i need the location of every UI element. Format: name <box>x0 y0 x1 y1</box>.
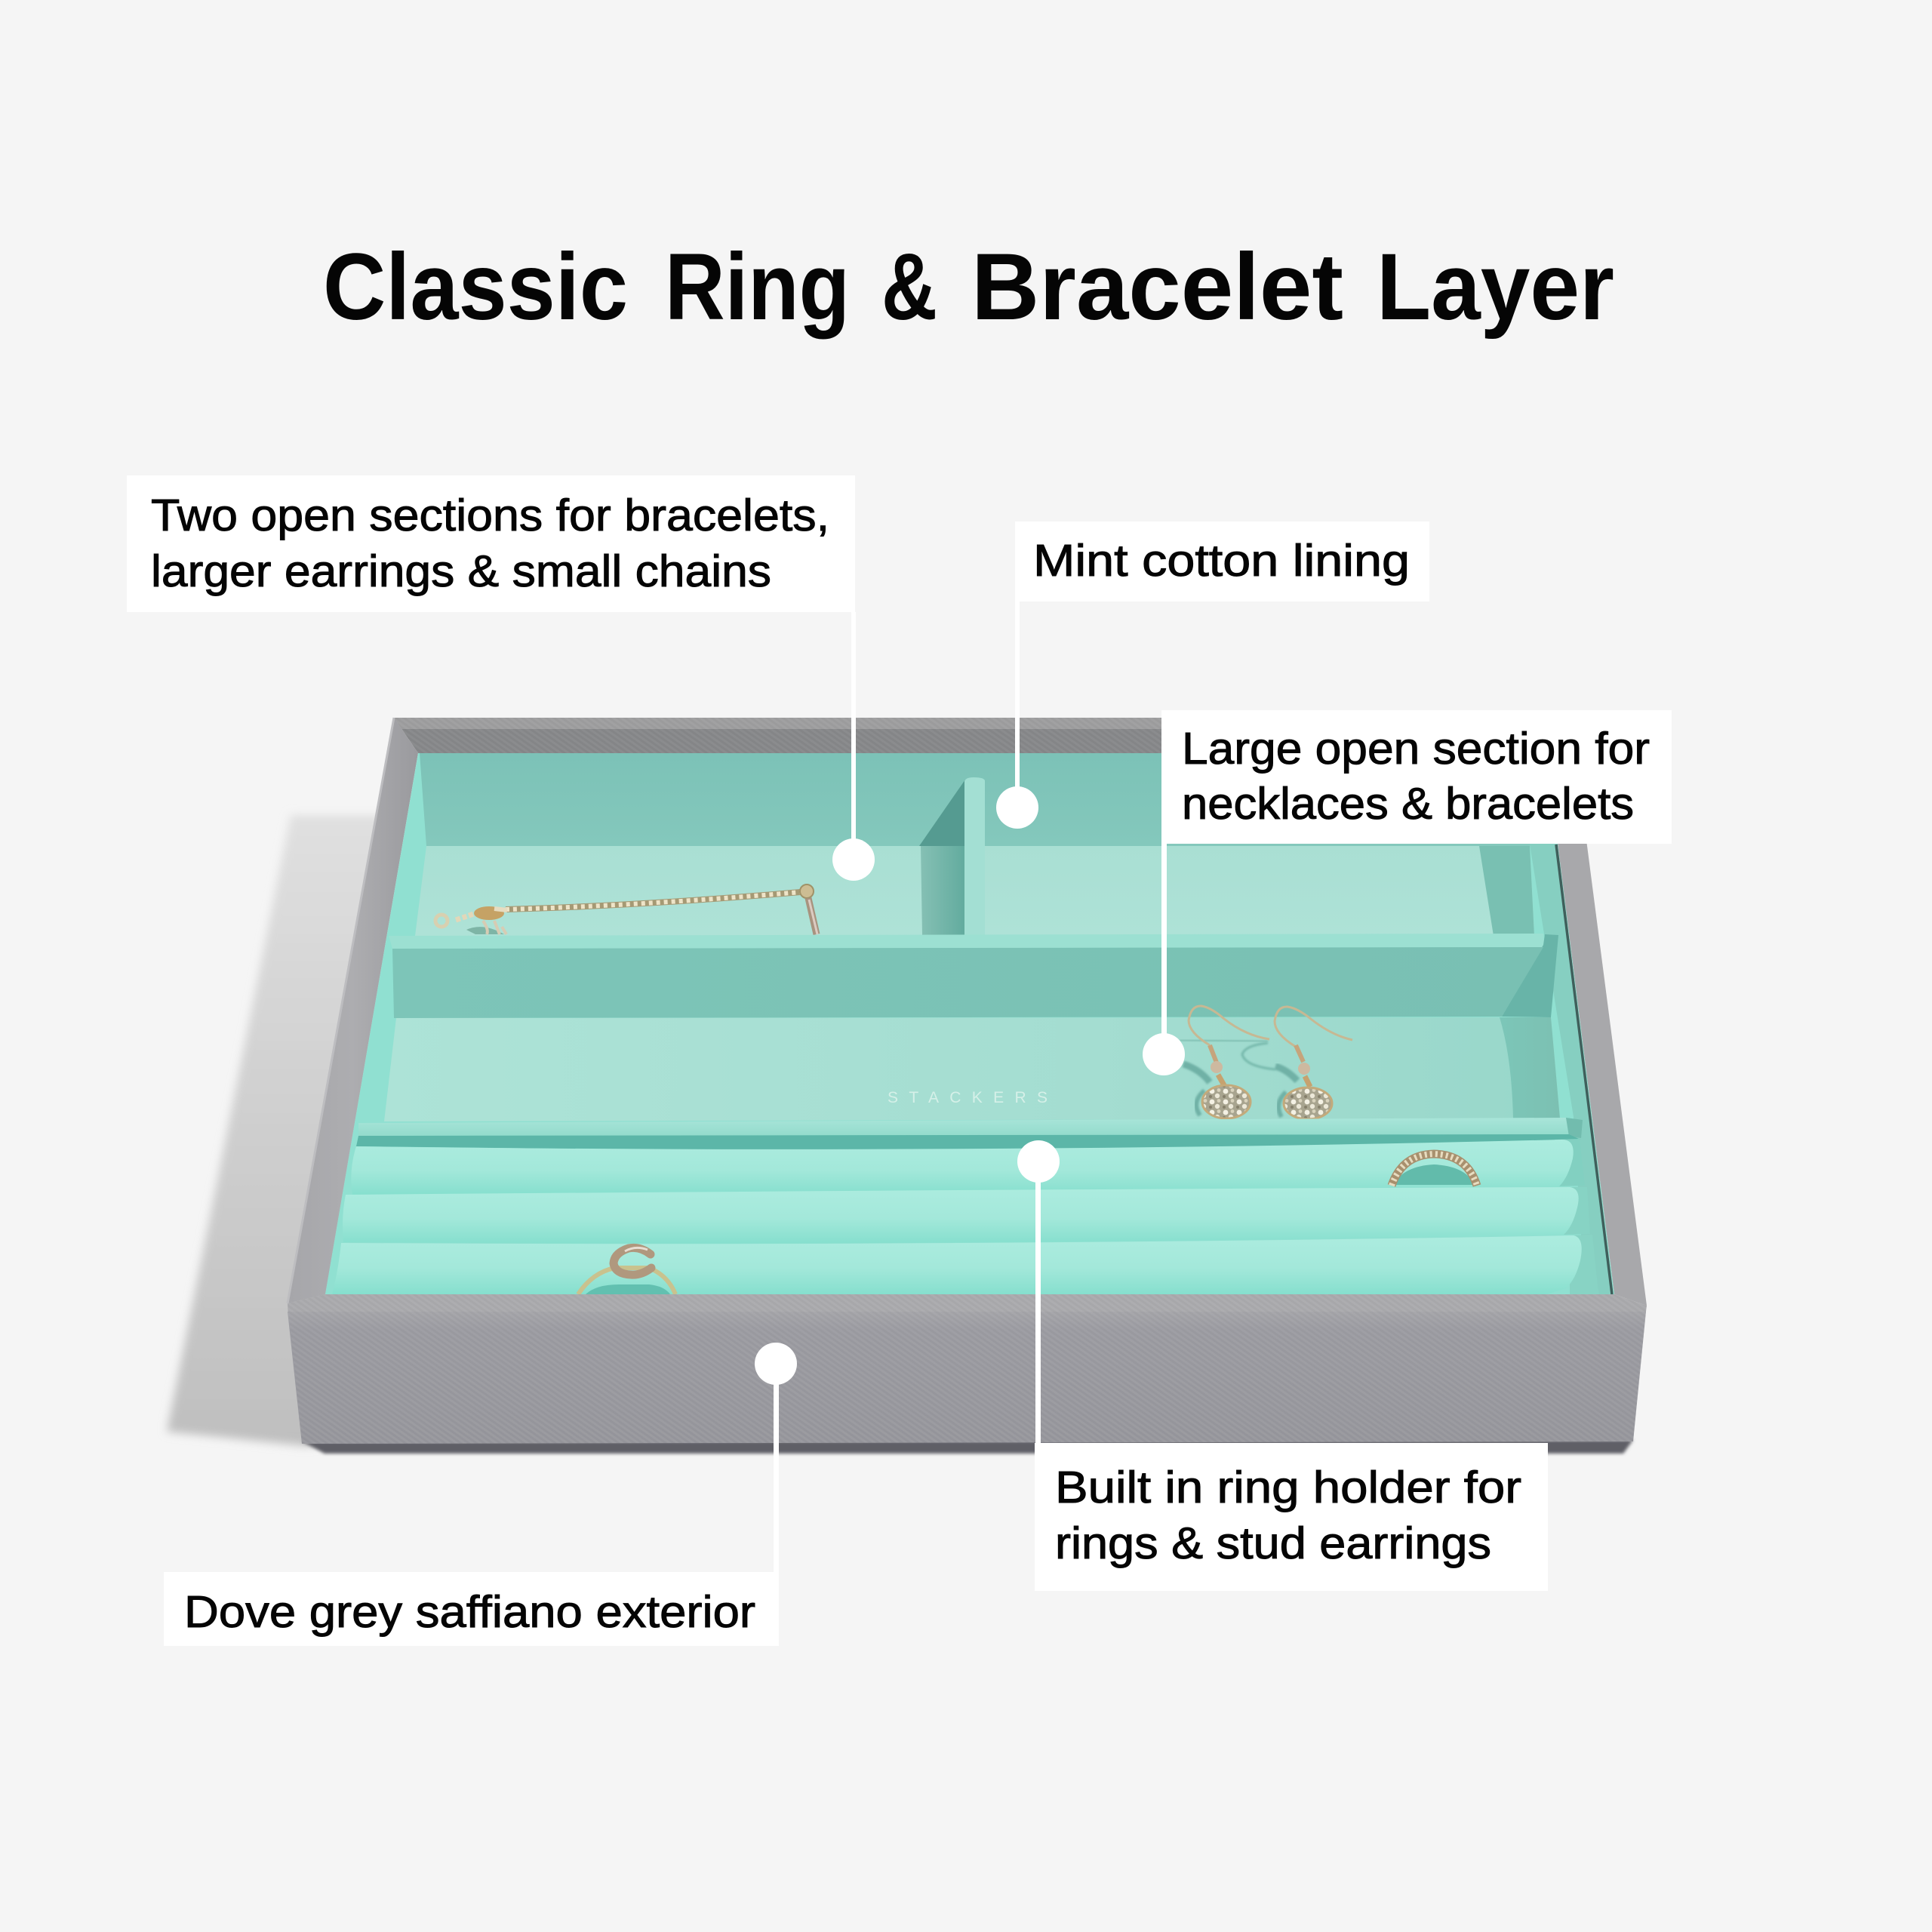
leader line <box>851 612 856 860</box>
label text <box>1055 1463 1521 1568</box>
label box <box>1035 1443 1548 1591</box>
front edge bevel <box>288 1294 1647 1317</box>
under-tray dark shadow <box>302 1440 1633 1454</box>
grey rim: back <box>394 718 1571 753</box>
title: Ring <box>665 235 850 340</box>
long divider right end <box>1502 934 1558 1017</box>
label text: Built in ring holder for <box>1055 1463 1521 1512</box>
grey rim: left <box>288 718 418 1303</box>
leader line <box>1035 1161 1041 1444</box>
label text: Dove grey saffiano exterior <box>184 1587 755 1637</box>
callout: built in ring holder <box>1017 1140 1548 1591</box>
leader line <box>774 1364 779 1572</box>
title: Layer <box>1377 235 1614 340</box>
ledge right end <box>1566 1118 1583 1138</box>
title: Classic <box>323 235 628 340</box>
label box <box>1161 710 1672 844</box>
label box <box>127 475 855 612</box>
product photo: jewellery tray <box>167 718 1647 1454</box>
ring holder ledge <box>358 1118 1569 1136</box>
left rim highlight <box>288 718 394 1303</box>
back wall <box>420 753 1540 846</box>
label text: Mint cotton lining <box>1033 536 1410 586</box>
callout: mint cotton lining <box>996 521 1429 829</box>
cast shadow <box>167 815 392 1446</box>
label text: larger earrings & small chains <box>151 546 771 596</box>
label box <box>1015 521 1429 601</box>
leader line <box>1015 601 1020 808</box>
marker dot <box>1017 1140 1060 1183</box>
vertical divider <box>964 777 985 936</box>
bracelet <box>435 884 817 934</box>
left ring with letter charm <box>578 1247 675 1294</box>
label text: Large open section for <box>1182 724 1650 774</box>
marker dot <box>832 838 875 881</box>
callout: dove grey exterior <box>164 1343 797 1646</box>
leader line <box>1161 844 1167 1054</box>
right inner wall <box>1530 753 1613 1294</box>
right shade on front floor <box>1500 1017 1560 1118</box>
divider shadow on rear floor <box>921 846 965 935</box>
label text: Two open sections for bracelets, <box>151 491 829 540</box>
divider shadow on back wall <box>919 780 965 846</box>
right earring <box>1275 1007 1352 1119</box>
callout: two open sections <box>127 475 875 881</box>
ring roll 1 <box>351 1139 1585 1195</box>
title: Bracelet <box>971 235 1343 340</box>
label text <box>151 491 829 596</box>
stackers logo: STACKERS <box>888 1089 1048 1106</box>
ring roll 2 <box>343 1187 1590 1244</box>
left earring <box>1180 1006 1275 1118</box>
long divider face <box>392 947 1543 1018</box>
marker dot <box>996 786 1038 829</box>
front floor <box>384 1017 1560 1121</box>
right floor shade <box>1479 846 1534 936</box>
long divider ledge <box>389 934 1545 949</box>
label text: rings & stud earrings <box>1055 1518 1491 1568</box>
saffiano texture <box>288 1294 1647 1444</box>
earrings <box>1180 1006 1352 1119</box>
right ring <box>1392 1154 1477 1186</box>
dark inner rim line <box>1556 844 1612 1294</box>
label text: necklaces & bracelets <box>1182 779 1634 829</box>
marker dot <box>755 1343 797 1385</box>
title: & <box>881 235 937 340</box>
grey rim: right <box>1546 718 1647 1306</box>
rear floor <box>415 846 1534 936</box>
callout: large open section <box>1143 710 1672 1075</box>
label box <box>164 1572 779 1646</box>
ring slot shadow <box>356 1134 1580 1153</box>
mint interior base <box>325 753 1614 1294</box>
marker dot <box>1143 1033 1185 1075</box>
ring roll 3 <box>332 1235 1599 1294</box>
label text <box>1182 724 1650 829</box>
front face <box>288 1312 1646 1444</box>
